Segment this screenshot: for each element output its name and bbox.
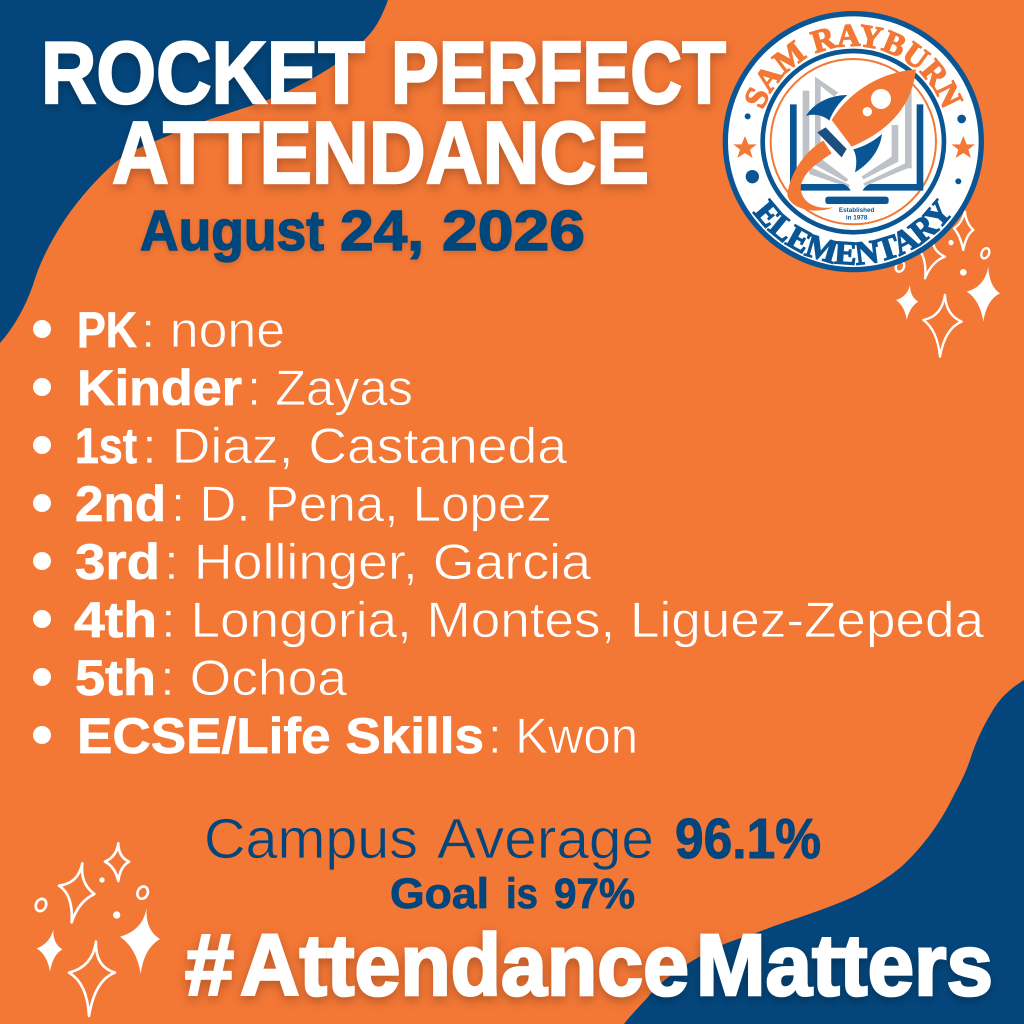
Kinder <box>77 360 413 416</box>
1st: 1st <box>75 418 137 474</box>
hashtag: Matters <box>696 917 993 1014</box>
5th: 5th <box>75 650 156 706</box>
blob: bottom-right navy <box>624 680 1024 1024</box>
logo stars and dots <box>733 113 975 184</box>
2nd: : D. Pena, Lopez <box>171 476 552 532</box>
established text <box>839 207 875 222</box>
rocket <box>787 69 916 211</box>
established text: in 1978 <box>846 215 868 222</box>
4th: 4th <box>74 592 157 648</box>
5th <box>75 650 347 706</box>
hashtag: # <box>185 917 234 1014</box>
list of perfect attendance by grade <box>33 302 984 764</box>
Kinder: Kinder <box>77 360 242 416</box>
campus average: Average <box>437 807 654 871</box>
title <box>41 23 726 202</box>
goal <box>390 870 635 918</box>
PK: : none <box>141 302 285 358</box>
3rd: 3rd <box>75 534 160 590</box>
2nd: 2nd <box>75 476 166 532</box>
logo ring text: ELEMENTARY <box>752 198 952 266</box>
sparkles: top right <box>894 212 1000 357</box>
title: ROCKET <box>41 23 365 122</box>
date: 2026 <box>442 199 585 263</box>
4th: : Longoria, Montes, Liguez-Zepeda <box>161 592 984 648</box>
established text: Established <box>839 207 875 214</box>
blob: top-left navy <box>0 0 388 343</box>
logo ring text <box>745 24 964 266</box>
sparkles: bottom left <box>34 843 160 1016</box>
ECSE/Life Skills: : Kwon <box>488 708 638 764</box>
date: 24, <box>340 199 424 263</box>
Kinder: : Zayas <box>247 360 413 416</box>
5th: : Ochoa <box>160 650 347 706</box>
title: PERFECT <box>391 23 726 122</box>
goal: is <box>506 870 538 918</box>
date <box>140 199 585 263</box>
1st: : Diaz, Castaneda <box>142 418 567 474</box>
goal: 97% <box>554 870 635 918</box>
title: ATTENDANCE <box>112 103 649 202</box>
3rd: : Hollinger, Garcia <box>164 534 591 590</box>
logo book and rocket artwork <box>787 69 923 222</box>
campus average: Campus <box>204 807 418 871</box>
logo: Sam Rayburn Elementary seal <box>722 11 984 272</box>
ECSE/Life Skills <box>77 708 638 764</box>
bullet dots <box>33 320 51 744</box>
logo ring text: SAM RAYBURN <box>745 24 964 109</box>
PK <box>77 302 285 358</box>
campus average <box>204 807 821 871</box>
hashtag <box>185 917 993 1014</box>
campus average: 96.1% <box>675 807 821 871</box>
ECSE/Life Skills: ECSE/Life Skills <box>77 708 484 764</box>
hashtag: Attendance <box>240 917 689 1014</box>
open book <box>790 77 923 204</box>
goal: Goal <box>390 870 489 918</box>
PK: PK <box>77 302 137 358</box>
date: August <box>140 199 324 263</box>
